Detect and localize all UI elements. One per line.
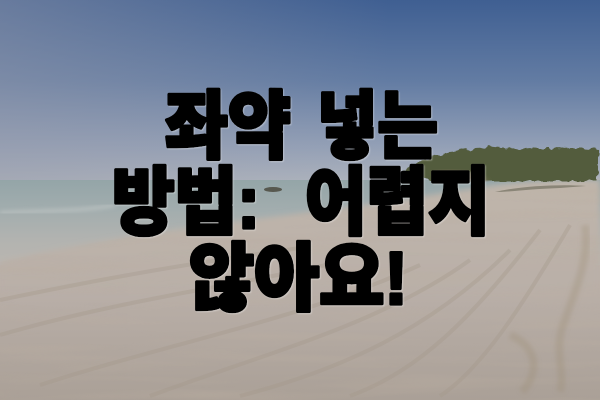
sky xyxy=(0,0,600,181)
title line 1: 넣는 xyxy=(317,85,438,168)
rock xyxy=(264,187,282,192)
title line 1: 좌약 xyxy=(165,85,291,168)
title line 3: 않아요! xyxy=(189,237,408,320)
title line 2: 방법: xyxy=(112,161,260,244)
title xyxy=(112,85,490,320)
title line 1 xyxy=(165,85,438,168)
title line 2: 어렵지 xyxy=(305,161,490,244)
title line 2 xyxy=(112,161,490,244)
sea xyxy=(0,180,600,265)
island xyxy=(404,148,598,181)
sand xyxy=(0,180,600,400)
